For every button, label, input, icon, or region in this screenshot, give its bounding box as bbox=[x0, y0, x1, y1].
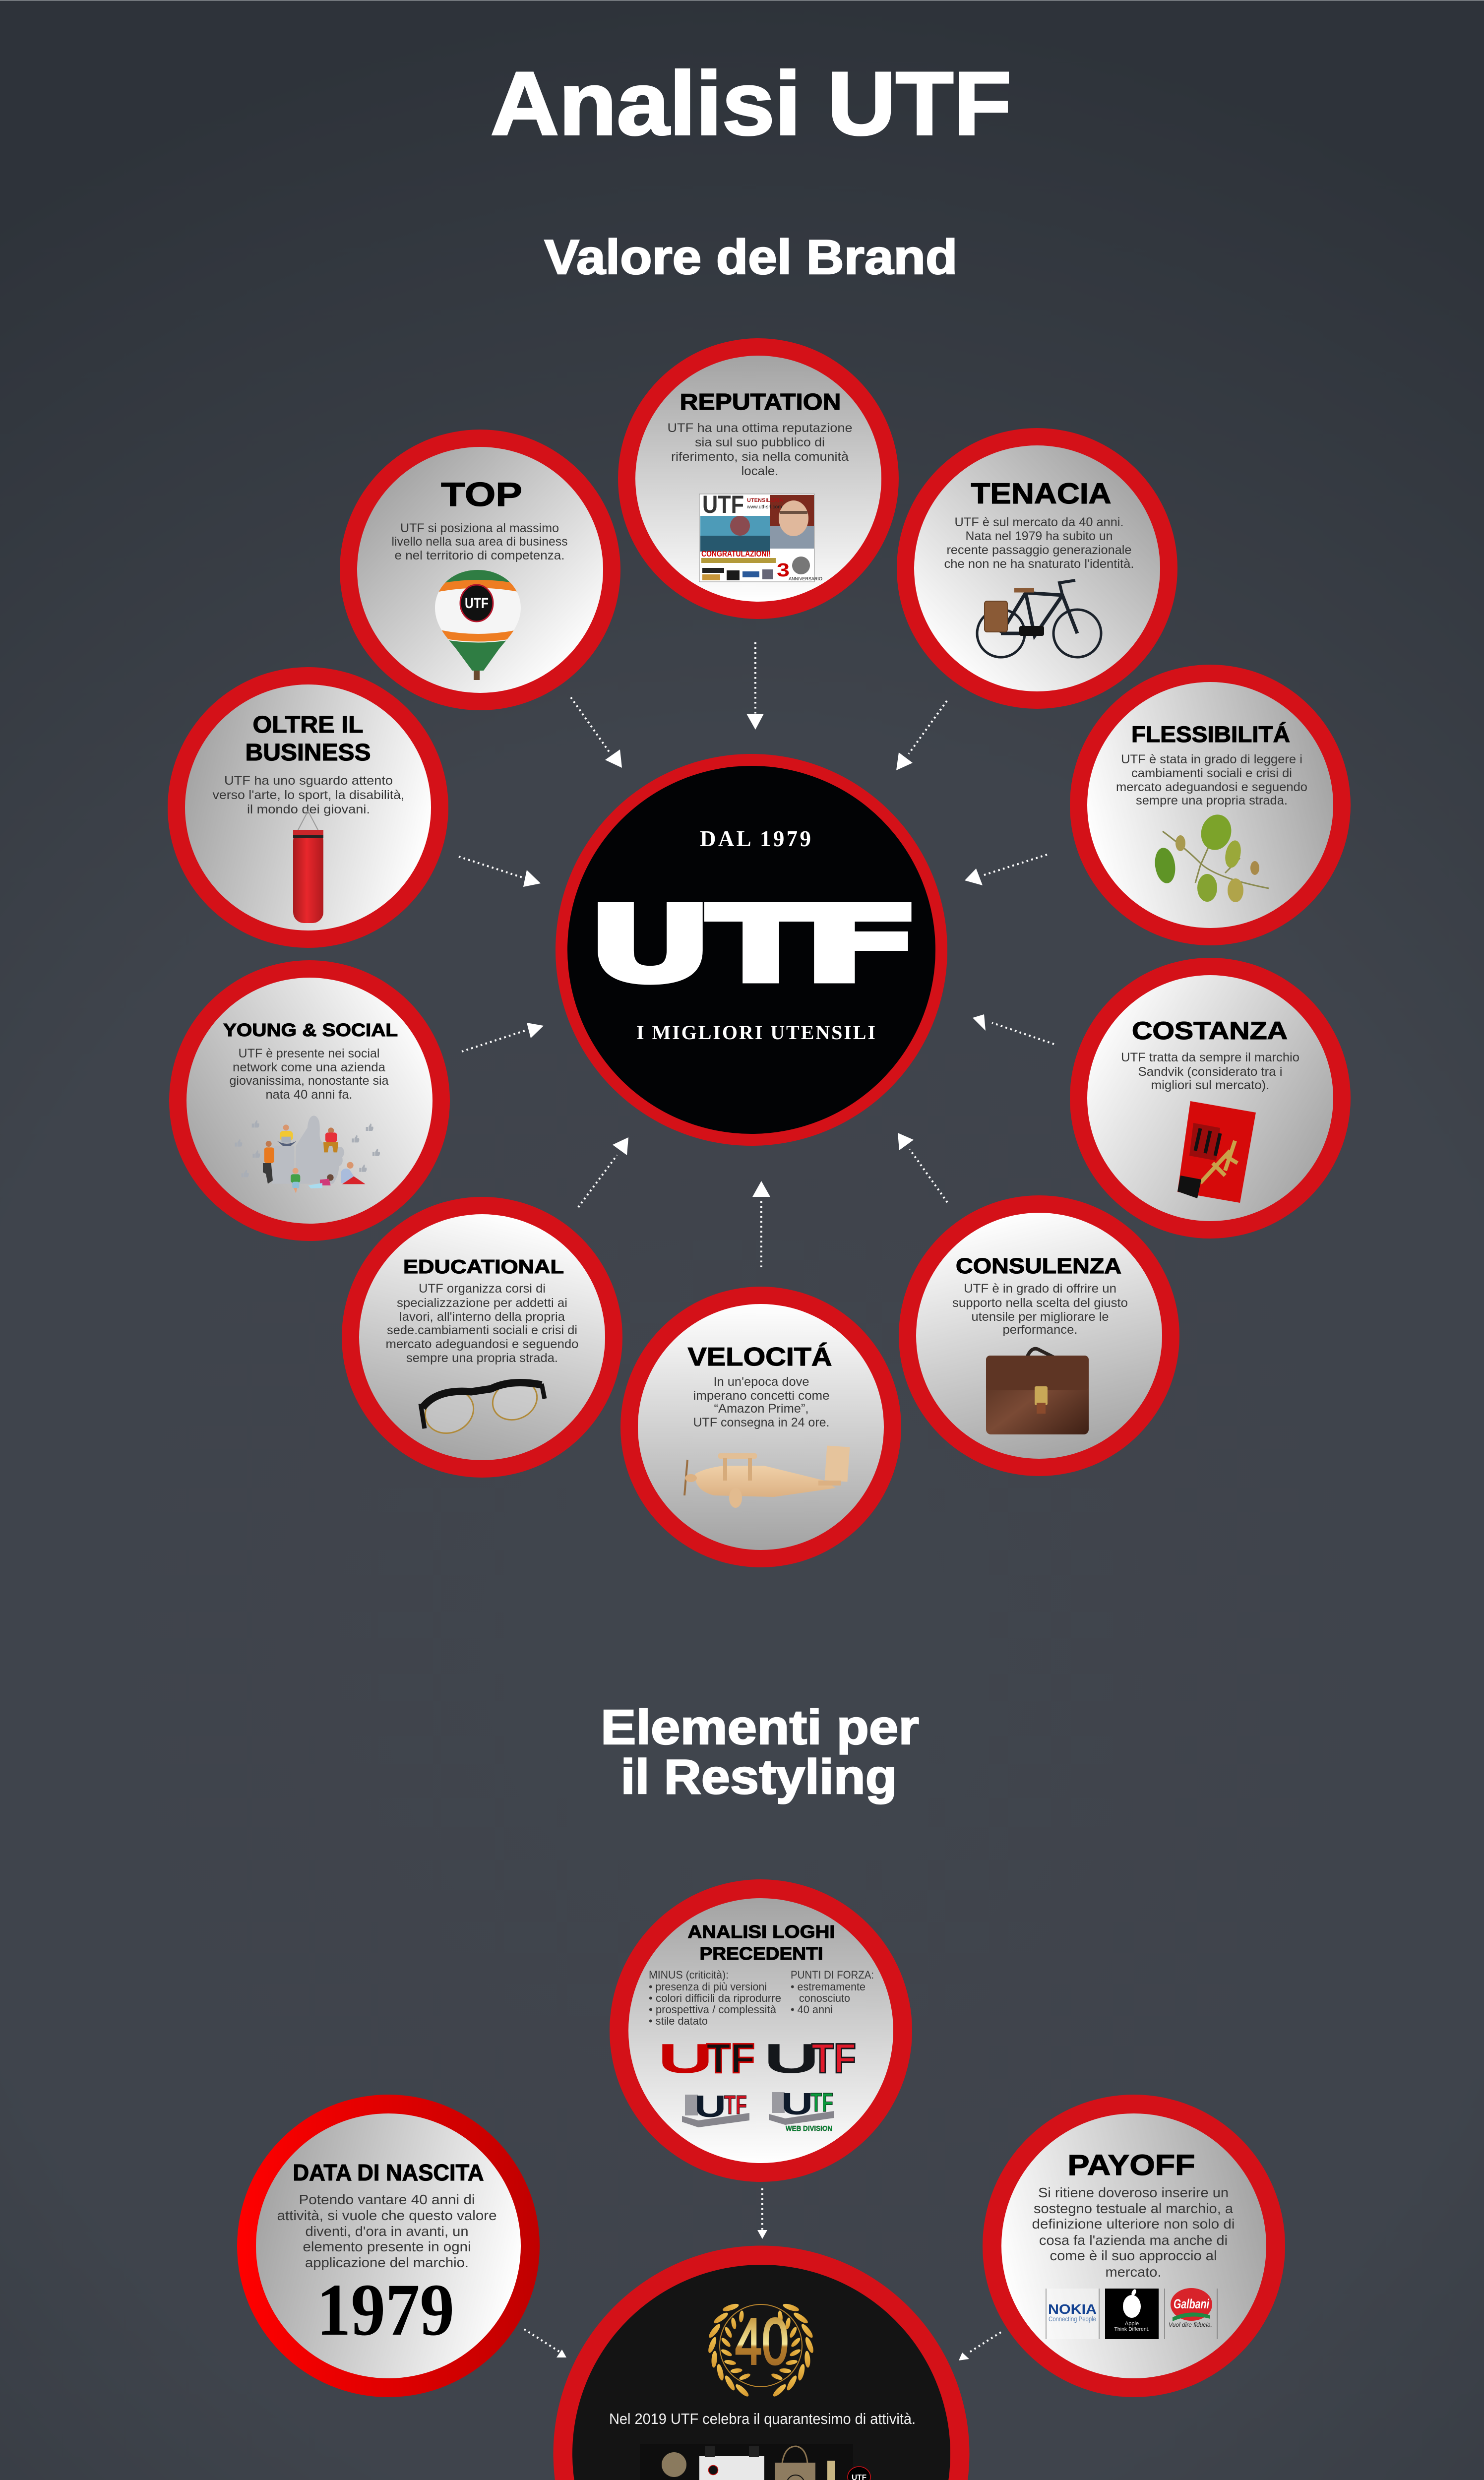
panel: top: e nel territorio di competenza. bbox=[395, 549, 564, 562]
panel: oltre il business: UTF ha uno sguardo attento bbox=[224, 774, 393, 788]
image: previous logos: TF bbox=[706, 2035, 755, 2082]
panel: analisi loghi precedenti: ANALISI LOGHI bbox=[687, 1922, 835, 1942]
image: stationery mockup bbox=[640, 2444, 870, 2480]
panel: data di nascita: elemento presente in ogni bbox=[303, 2239, 471, 2254]
panel: costanza bbox=[1070, 958, 1351, 1239]
panel: reputation: UTF ha una ottima reputazione bbox=[668, 421, 852, 435]
logo: nokia bbox=[1046, 2289, 1099, 2339]
image: anniversary poster: CONGRATULAZIONI! bbox=[701, 549, 771, 558]
arrow: educational to centre bbox=[578, 1137, 628, 1207]
arrow: consulenza to centre bbox=[898, 1133, 947, 1202]
panel: data di nascita: Potendo vantare 40 anni di bbox=[299, 2192, 475, 2207]
panel: analisi loghi precedenti bbox=[610, 1879, 912, 2182]
image: anniversary poster: UTF bbox=[702, 491, 744, 518]
panel: velocita: “Amazon Prime”, bbox=[714, 1402, 808, 1416]
logo: galbani bbox=[1165, 2288, 1217, 2339]
text: minus column: MINUS (criticità): bbox=[649, 1969, 729, 1981]
image: anniversary poster: www.utf-srl.com bbox=[746, 504, 782, 510]
panel: educational: sede.cambiamenti sociali e crisi di bbox=[387, 1323, 577, 1337]
panel: young and social: YOUNG & SOCIAL bbox=[223, 1020, 398, 1040]
image: people with likes bbox=[235, 1116, 380, 1193]
panel: data di nascita: DATA DI NASCITA bbox=[293, 2160, 484, 2185]
logo wordmark UTF bbox=[587, 883, 923, 1006]
panel: young and social: giovanissima, nonostante sia bbox=[229, 1074, 389, 1088]
panel: central UTF logo: DAL 1979 bbox=[700, 826, 811, 851]
panel: velocita: imperano concetti come bbox=[693, 1389, 829, 1403]
arrow: payoff to centre bbox=[959, 2332, 1001, 2360]
panel: young and social: network come una azienda bbox=[233, 1060, 385, 1074]
image: bicycle bbox=[977, 580, 1101, 657]
panel: educational: specializzazione per addetti ai bbox=[397, 1296, 567, 1310]
panel: data di nascita bbox=[237, 2095, 540, 2397]
text: punti di forza column bbox=[791, 1969, 874, 2016]
panel: tenacia: recente passaggio generazionale bbox=[946, 543, 1132, 557]
panel: consulenza: utensile per migliorare le bbox=[971, 1310, 1109, 1324]
panel: consulenza bbox=[899, 1195, 1179, 1476]
image: previous logos: TF bbox=[724, 2090, 747, 2120]
logo wordmark UTF: T bbox=[707, 883, 815, 1006]
image: previous logos: WEB DIVISION bbox=[786, 2124, 832, 2133]
panel: consulenza: supporto nella scelta del giusto bbox=[952, 1296, 1128, 1310]
panel: 40 anniversary centre bbox=[554, 2246, 969, 2480]
panel: costanza: UTF tratta da sempre il marchio bbox=[1121, 1051, 1299, 1064]
image: leather bag bbox=[986, 1349, 1089, 1434]
panel: payoff: sostegno testuale al marchio, a bbox=[1034, 2201, 1233, 2216]
logo: galbani: Galbani bbox=[1174, 2296, 1209, 2311]
panel: flessibilita: UTF è stata in grado di leggere i bbox=[1121, 752, 1302, 766]
arrow: data di nascita to centre bbox=[524, 2329, 566, 2357]
image: anniversary poster: ANNIVERSARIO bbox=[789, 576, 822, 581]
panel: tenacia: TENACIA bbox=[971, 478, 1111, 510]
text: punti di forza column: • estremamente bbox=[791, 1981, 866, 1993]
panel: analisi loghi precedenti: PRECEDENTI bbox=[699, 1943, 823, 1964]
panel: tenacia: Nata nel 1979 ha subito un bbox=[965, 529, 1113, 543]
heading: Elementi per il Restyling bbox=[601, 1700, 919, 1804]
image: hot air balloon: UTF bbox=[465, 595, 489, 612]
panel: oltre il business: verso l'arte, lo sport, la disabilità, bbox=[212, 788, 405, 802]
panel: top: UTF si posiziona al massimo bbox=[400, 521, 559, 535]
panel: top: livello nella sua area di business bbox=[392, 535, 567, 549]
arrow: young and social to centre bbox=[462, 1023, 544, 1052]
text: punti di forza column: • 40 anni bbox=[791, 2003, 833, 2016]
panel: flessibilita: cambiamenti sociali e crisi di bbox=[1131, 766, 1292, 780]
panel: payoff: definizione ulteriore non solo di bbox=[1032, 2216, 1235, 2232]
image: previous logos: U bbox=[658, 2035, 713, 2082]
image: previous logos: TF bbox=[811, 2035, 856, 2082]
arrow: reputation to centre bbox=[746, 642, 764, 730]
image: glasses bbox=[418, 1373, 545, 1441]
panel: payoff: Si ritiene doveroso inserire un bbox=[1038, 2185, 1229, 2200]
image: anniversary poster bbox=[699, 491, 822, 582]
heading: Valore del Brand: Valore del Brand bbox=[545, 230, 957, 284]
panel: consulenza: UTF è in grado di offrire un bbox=[964, 1282, 1116, 1296]
panel: 40 anniversary centre: Nel 2019 UTF celebra il quarantesimo di attività. bbox=[609, 2410, 916, 2427]
panel: reputation: sia sul suo pubblico di bbox=[695, 435, 825, 449]
logo wordmark UTF: U bbox=[587, 883, 714, 1006]
logo: galbani: Vuol dire fiducia. bbox=[1169, 2321, 1212, 2328]
panel: young and social: UTF è presente nei social bbox=[238, 1047, 380, 1060]
panel: oltre il business bbox=[168, 667, 448, 948]
image: previous logos: U bbox=[764, 2035, 819, 2082]
panel: consulenza: CONSULENZA bbox=[956, 1254, 1121, 1278]
panel: velocita: VELOCITÁ bbox=[687, 1343, 832, 1371]
panel: educational: lavori, all'interno della propria bbox=[399, 1310, 565, 1324]
panel: payoff bbox=[983, 2095, 1285, 2397]
arrow: tenacia to centre bbox=[896, 701, 947, 770]
icon: gold laurel wreath with 40 bbox=[705, 2297, 817, 2399]
heading: Elementi per il Restyling: Elementi per bbox=[601, 1700, 919, 1754]
panel: costanza: COSTANZA bbox=[1132, 1017, 1288, 1045]
image: previous logos bbox=[658, 2035, 856, 2133]
heading: Elementi per il Restyling: il Restyling bbox=[621, 1749, 897, 1804]
panel: costanza: migliori sul mercato). bbox=[1151, 1078, 1270, 1092]
image: previous logos: TF bbox=[810, 2088, 833, 2117]
panel: payoff: come è il suo approccio al bbox=[1050, 2248, 1217, 2263]
arrow: flessibilita to centre bbox=[965, 855, 1047, 885]
panel: data di nascita: applicazione del marchio. bbox=[305, 2255, 469, 2270]
title: Analisi UTF bbox=[491, 54, 1011, 154]
arrow: top to centre bbox=[571, 697, 622, 768]
text: minus column: • presenza di più versioni bbox=[649, 1981, 767, 1993]
panel: young and social bbox=[169, 960, 450, 1241]
image: hot air balloon bbox=[435, 570, 521, 680]
text: minus column: • colori difficili da riprodurre bbox=[649, 1992, 781, 2004]
panel: data di nascita: diventi, d'ora in avanti, un bbox=[306, 2224, 468, 2239]
image: previous logos: U bbox=[781, 2087, 813, 2121]
image: red catalogue bbox=[1177, 1101, 1256, 1203]
text: punti di forza column: PUNTI DI FORZA: bbox=[791, 1969, 874, 1981]
panel: educational: EDUCATIONAL bbox=[403, 1256, 564, 1278]
panel: flessibilita: mercato adeguandosi e seguendo bbox=[1116, 780, 1307, 794]
panel: reputation: REPUTATION bbox=[680, 389, 841, 415]
panel: data di nascita: attività, si vuole che questo valore bbox=[277, 2208, 497, 2223]
arrow: velocita to centre bbox=[752, 1181, 770, 1267]
logo: apple: Think Different. bbox=[1114, 2326, 1150, 2332]
panel: flessibilita: FLESSIBILITÁ bbox=[1131, 722, 1290, 747]
panel: reputation: riferimento, sia nella comunità bbox=[671, 450, 849, 464]
logo: apple bbox=[1105, 2289, 1159, 2339]
panel: payoff: PAYOFF bbox=[1067, 2149, 1195, 2181]
panel: reputation bbox=[618, 338, 899, 619]
panel: educational: UTF organizza corsi di bbox=[419, 1282, 546, 1296]
text: minus column bbox=[649, 1969, 781, 2027]
panel: tenacia: che non ne ha snaturato l'identità. bbox=[944, 557, 1134, 571]
panel: payoff: cosa fa l'azienda ma anche di bbox=[1039, 2232, 1228, 2248]
logo: nokia: NOKIA bbox=[1048, 2301, 1097, 2317]
image: wooden plane bbox=[684, 1445, 850, 1508]
text: punti di forza column: conosciuto bbox=[799, 1992, 850, 2004]
icon: gold laurel wreath with 40: 40 bbox=[735, 2305, 789, 2378]
panel: central UTF logo: I MIGLIORI UTENSILI bbox=[636, 1021, 875, 1044]
panel: top bbox=[340, 430, 620, 710]
panel: velocita: UTF consegna in 24 ore. bbox=[693, 1416, 829, 1429]
text: minus column: • prospettiva / complessità bbox=[649, 2003, 777, 2016]
panel: oltre il business: il mondo dei giovani. bbox=[247, 803, 370, 816]
image: anniversary poster: UTENSILERIA bbox=[747, 497, 783, 503]
panel: costanza: Sandvik (considerato tra i bbox=[1138, 1065, 1283, 1079]
panel: educational: mercato adeguandosi e seguendo bbox=[386, 1337, 578, 1351]
arrow: analisi loghi to centre bbox=[757, 2188, 767, 2239]
panel: educational: sempre una propria strada. bbox=[406, 1351, 558, 1365]
panel: central UTF logo bbox=[556, 754, 947, 1146]
panel: educational bbox=[342, 1197, 622, 1478]
panel: tenacia: UTF è sul mercato da 40 anni. bbox=[954, 515, 1124, 529]
panel: velocita: In un'epoca dove bbox=[713, 1375, 809, 1389]
logo: apple: Apple bbox=[1125, 2321, 1139, 2327]
image: previous logos: U bbox=[694, 2090, 726, 2124]
text: minus column: • stile datato bbox=[649, 2015, 708, 2027]
panel: velocita bbox=[620, 1287, 901, 1567]
panel: consulenza: performance. bbox=[1003, 1323, 1077, 1337]
panel: oltre il business: OLTRE IL bbox=[253, 712, 363, 738]
panel: payoff: mercato. bbox=[1105, 2264, 1162, 2280]
arrow: oltre il business to centre bbox=[459, 857, 541, 887]
logo: nokia: Connecting People bbox=[1049, 2315, 1096, 2323]
image: punching bag bbox=[293, 811, 323, 923]
panel: young and social: nata 40 anni fa. bbox=[266, 1088, 352, 1102]
panel: top: TOP bbox=[441, 476, 522, 513]
numeral 1979: 1979 bbox=[316, 2269, 454, 2351]
panel: reputation: locale. bbox=[741, 464, 779, 478]
image: vine branch bbox=[1153, 811, 1269, 902]
logo wordmark UTF: F bbox=[802, 883, 923, 1006]
image: anniversary poster: 3 bbox=[777, 560, 790, 581]
panel: tenacia bbox=[897, 428, 1177, 709]
panel: oltre il business: BUSINESS bbox=[245, 740, 371, 766]
panel: flessibilita: sempre una propria strada. bbox=[1136, 794, 1288, 807]
panel: flessibilita bbox=[1070, 665, 1351, 945]
arrow: costanza to centre bbox=[973, 1014, 1054, 1044]
